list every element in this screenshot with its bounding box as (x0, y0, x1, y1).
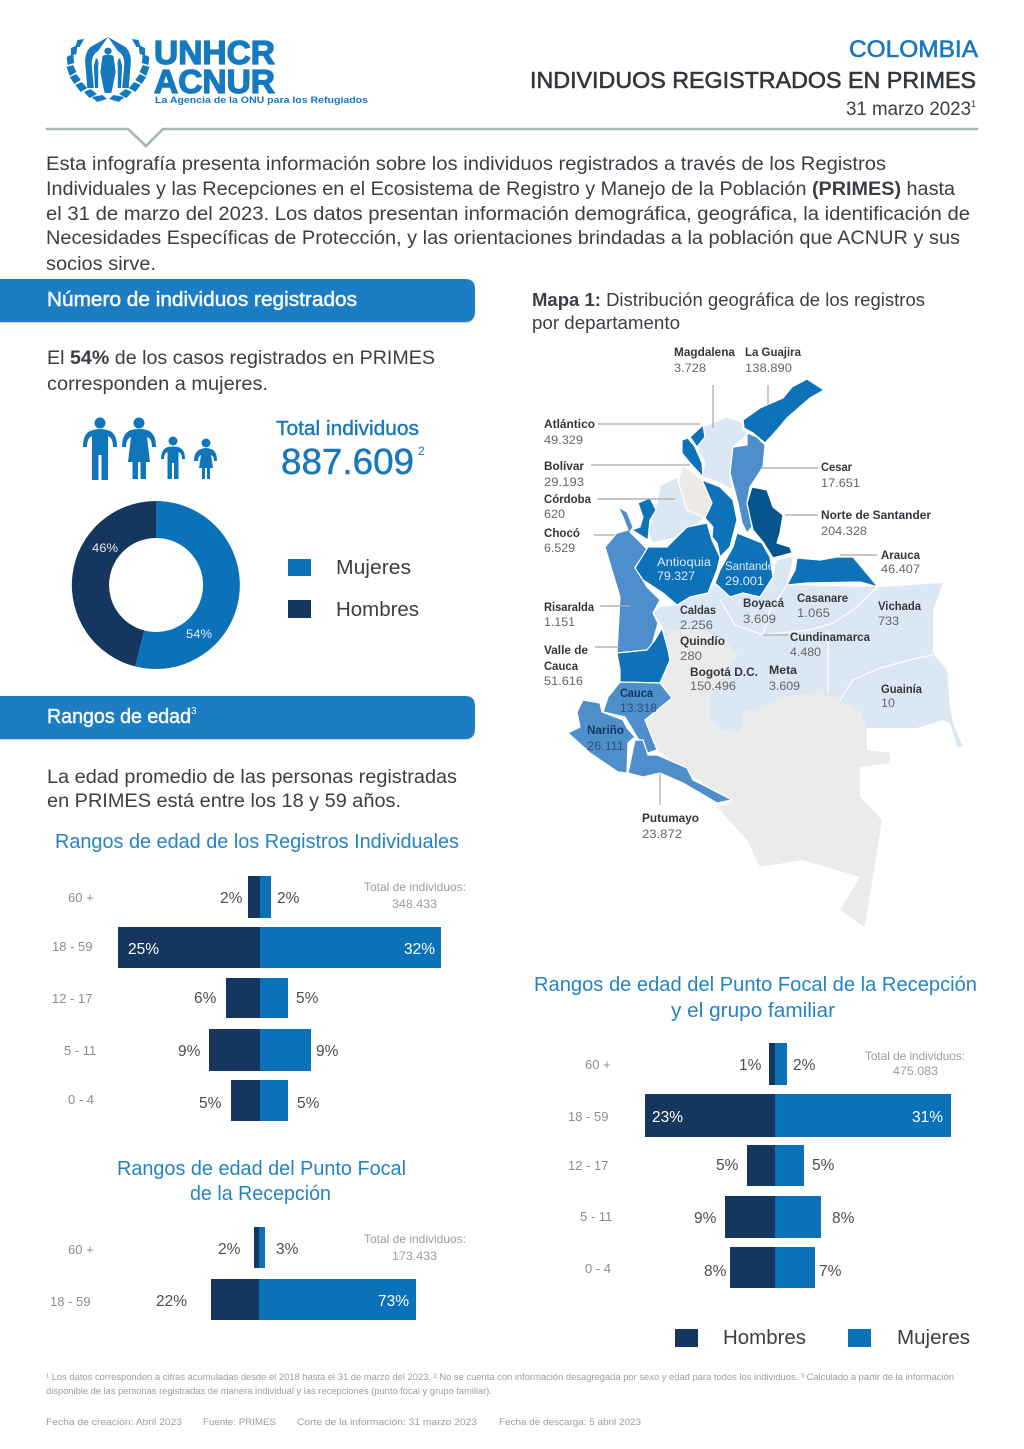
labels: department names and values: Nariño (587, 725, 624, 737)
chart: age pyramid of individual records: 12 - 17 (52, 991, 92, 1006)
donut legend: Mujeres (336, 557, 411, 579)
labels: department names and values: 138.890 (745, 363, 792, 375)
region: Arauca (787, 557, 878, 587)
intro text block: socios sirve. (46, 254, 156, 275)
labels: department names and values: Cauca (544, 661, 579, 673)
region: Sucre (677, 467, 712, 518)
chart: age pyramid of individual records: 60 + (68, 890, 94, 905)
chart: age pyramid of focal point reception: 73% (378, 1293, 409, 1310)
labels: department names and values: 79.327 (657, 571, 695, 583)
labels: department names and values: 2.256 (680, 620, 713, 632)
labels: department names and values: Cauca (620, 688, 654, 700)
map title (532, 290, 925, 333)
labels: department names and values: 29.193 (544, 477, 584, 489)
chart: age pyramid of individual records: 6% (194, 990, 217, 1007)
labels: department names and values: Boyacá (743, 598, 785, 610)
icon: family of four people (83, 418, 217, 480)
section header: Rangos de edad: Rangos de edad (47, 706, 191, 728)
region: Santander (715, 533, 773, 597)
labels: department names and values: 1.065 (797, 608, 830, 620)
chart legend (675, 1327, 970, 1349)
statement: 54% women: El 54% de los casos registrados en PRIMES (47, 348, 435, 369)
statement: 54% women: corresponden a mujeres. (47, 374, 268, 395)
labels: department names and values: Cundinamarca (790, 632, 871, 644)
section header: Número de individuos registrados (0, 279, 475, 323)
region: Norte de Santander (747, 487, 792, 558)
heading: Punto Focal and family group chart (534, 974, 977, 1022)
region: La Guajira (743, 379, 824, 443)
heading: Punto Focal chart: de la Recepción (190, 1183, 331, 1205)
footer metadata: Fuente: PRIMES (203, 1417, 276, 1428)
region: Valle del Cauca (617, 628, 670, 683)
labels: department names and values: 13.318 (620, 703, 657, 715)
labels: department names and values: Norte de Santander (821, 510, 932, 522)
labels: department names and values: 620 (544, 509, 565, 521)
donut legend: Hombres (336, 599, 419, 621)
chart: age pyramid of focal point and family group: 5% (716, 1157, 739, 1174)
labels: department names and values: Putumayo (642, 813, 699, 825)
total individuals: Total individuos (276, 417, 419, 440)
chart: age pyramid of focal point and family group: 60 + (585, 1057, 611, 1072)
statement: 54% women (47, 348, 435, 395)
labels: department names and values: 29.001 (725, 576, 764, 588)
labels: department names and values: 49.329 (544, 435, 583, 447)
chart: age pyramid of individual records: 5% (297, 1095, 320, 1112)
labels: department names and values: 23.872 (642, 829, 682, 841)
donut chart: sex split (72, 501, 240, 669)
intro text block: Necesidades Específicas de Protección, y las orientaciones brindadas a la población que ACNUR y sus (46, 228, 960, 249)
footer metadata (46, 1417, 641, 1428)
chart: age pyramid of focal point and family group: 9% (694, 1210, 717, 1227)
region: Antioquia north (632, 498, 656, 540)
labels: department names and values: Santander (725, 561, 778, 573)
chart: age pyramid of individual records: 2% (220, 890, 243, 907)
chart: age pyramid of focal point and family group: 1% (739, 1057, 762, 1074)
total individuals (276, 417, 425, 482)
total individuals: 887.609 (281, 441, 414, 482)
footer metadata: Fecha de descarga: 5 abril 2023 (499, 1417, 641, 1428)
labels: department names and values: Guainía (881, 684, 923, 696)
labels: department names and values: 4.480 (790, 647, 821, 659)
labels: department names and values: Bolívar (544, 461, 585, 473)
section header: Número de individuos registrados: Número de individuos registrados (47, 289, 357, 311)
labels: department names and values: 6.529 (544, 543, 575, 555)
section header: Rangos de edad (0, 696, 475, 740)
chart: age pyramid of individual records: Total de individuos: (364, 880, 466, 894)
labels: department names and values: 26.111 (587, 741, 624, 753)
chart: age pyramid of focal point and family group: 475.083 (893, 1064, 938, 1078)
chart: age pyramid of focal point and family group: 8% (704, 1263, 727, 1280)
title block: COLOMBIA (849, 36, 978, 63)
chart: age pyramid of individual records: 348.433 (392, 897, 437, 911)
labels: department names and values: Atlántico (544, 419, 595, 431)
header logo: UNHCR ACNUR: La Agencia de la ONU para los Refugiados (155, 95, 368, 106)
labels: department names and values: 51.616 (544, 676, 583, 688)
footer metadata: Fecha de creación: Abril 2023 (46, 1417, 182, 1428)
labels: department names and values: Bogotá D.C. (690, 667, 758, 679)
heading: Punto Focal chart (117, 1158, 406, 1205)
chart: age pyramid of individual records: 32% (404, 941, 435, 958)
chart: age pyramid of individual records: 18 - 59 (52, 939, 92, 954)
labels: department names and values: Quindío (680, 636, 725, 648)
chart: age pyramid of individual records: 9% (178, 1043, 201, 1060)
header logo: UNHCR ACNUR: UNHCR (154, 34, 275, 71)
region: Cauca (603, 682, 672, 753)
region: light blue eastern departments (653, 557, 963, 747)
labels: department names and values: Vichada (878, 601, 922, 613)
heading: Punto Focal and family group chart: Rangos de edad del Punto Focal de la Recepción (534, 974, 977, 996)
labels: department names and values: 150.496 (690, 681, 736, 693)
region: Bolivar (682, 438, 737, 557)
intro text block: Individuales y las Recepciones en el Ecosistema de Registro y Manejo de la Población (PRIMES) hasta (46, 179, 955, 200)
region: Atlantico (690, 425, 705, 447)
chart legend: Hombres (723, 1327, 806, 1349)
intro text block (46, 154, 970, 275)
chart: age pyramid of individual records (52, 876, 466, 1121)
chart: age pyramid of focal point and family group: 0 - 4 (585, 1261, 611, 1276)
chart: age pyramid of focal point and family group: 5 - 11 (580, 1209, 612, 1224)
heading: Punto Focal chart: Rangos de edad del Punto Focal (117, 1158, 406, 1180)
donut chart: sex split: 54% (186, 627, 212, 641)
chart: age pyramid of focal point and family group: 2% (793, 1057, 816, 1074)
chart: age pyramid of focal point and family group: 7% (819, 1263, 842, 1280)
chart: age pyramid of focal point reception: Total de individuos: (364, 1232, 466, 1246)
statement: average age: en PRIMES está entre los 18 y 59 años. (47, 791, 401, 812)
labels: department names and values: Chocó (544, 528, 580, 540)
chart: age pyramid of individual records: 5% (199, 1095, 222, 1112)
intro text block: Esta infografía presenta información sobre los individuos registrados a través de los Registros (46, 154, 886, 175)
chart: age pyramid of focal point reception (50, 1227, 466, 1320)
labels: department names and values: 280 (680, 651, 702, 663)
labels: department names and values: Arauca (881, 550, 921, 562)
chart: age pyramid of individual records: 9% (316, 1043, 339, 1060)
header logo: UNHCR ACNUR: ACNUR (154, 63, 275, 100)
region: grey departments with no data (645, 630, 890, 927)
statement: average age: La edad promedio de las personas registradas (47, 767, 457, 788)
heading: Punto Focal and family group chart: y el grupo familiar (671, 1000, 835, 1022)
donut legend (288, 557, 419, 621)
labels: department names and values: 46.407 (881, 564, 920, 576)
title block (530, 36, 978, 120)
labels: department names and values: Casanare (797, 593, 848, 605)
header logo: UNHCR ACNUR (67, 34, 368, 106)
region: Choco and Risaralda (605, 507, 660, 653)
chart: age pyramid of focal point reception: 60 + (68, 1242, 94, 1257)
labels: department names and values: 3.609 (743, 614, 776, 626)
labels: department names and values: Antioquia (657, 557, 712, 569)
intro text block: el 31 de marzo del 2023. Los datos presentan información demográfica, geográfica, la identificación de (46, 204, 970, 225)
labels: department names and values: 10 (881, 698, 895, 710)
region: Cordoba (648, 477, 705, 543)
icon: UNHCR emblem with hands, person and laurel (67, 37, 149, 102)
labels: department names and values: 733 (878, 616, 899, 628)
chart: age pyramid of individual records: 5% (296, 990, 319, 1007)
heading: Registros Individuales chart: Rangos de edad de los Registros Individuales (55, 831, 459, 853)
statement: average age (47, 767, 457, 812)
chart: age pyramid of focal point and family group (568, 1043, 965, 1288)
chart: age pyramid of focal point and family group: 8% (832, 1210, 855, 1227)
chart legend: Mujeres (897, 1327, 970, 1349)
labels: department names and values: Meta (769, 665, 798, 677)
chart: age pyramid of individual records: 2% (277, 890, 300, 907)
labels: department names and values: 1.151 (544, 617, 575, 629)
total individuals: 2 (418, 444, 425, 458)
labels: department names and values: Cesar (821, 462, 853, 474)
map title: Mapa 1: Distribución geográfica de los registros (532, 290, 925, 310)
chart: age pyramid of focal point and family group: 12 - 17 (568, 1158, 608, 1173)
footer metadata: Corte de la información: 31 marzo 2023 (297, 1417, 477, 1428)
map: Colombia departments (544, 347, 963, 927)
region: Narino (568, 700, 635, 773)
chart: age pyramid of focal point and family group: 31% (912, 1109, 943, 1126)
section header: Rangos de edad: 3 (191, 706, 197, 717)
footnotes (46, 1372, 954, 1397)
region: Putumayo (628, 740, 732, 803)
labels: department names and values: 3.728 (674, 363, 706, 375)
labels: department names and values: 204.328 (821, 526, 867, 538)
chart: age pyramid of focal point and family group: 18 - 59 (568, 1109, 608, 1124)
title block: INDIVIDUOS REGISTRADOS EN PRIMES (530, 67, 976, 93)
chart: age pyramid of focal point and family group: 5% (812, 1157, 835, 1174)
labels: department names and values: La Guajira (745, 347, 802, 359)
labels: department names and values: Risaralda (544, 602, 595, 614)
region: Antioquia (635, 523, 720, 605)
footnotes: ¹ Los datos corresponden a cifras acumuladas desde el 2018 hasta el 31 de marzo del 2023. ² No se cuenta con información desagregada por sexo y edad para todos los individuos. ³ Calculado a partir de la información (46, 1372, 954, 1383)
chart: age pyramid of focal point and family group: Total de individuos: (865, 1049, 965, 1063)
chart: age pyramid of focal point reception: 173.433 (392, 1249, 437, 1263)
chart: age pyramid of individual records: 25% (128, 941, 159, 958)
chart: age pyramid of focal point and family group: 23% (652, 1109, 683, 1126)
footnotes: disponible de las personas registradas de manera individual y las recepciones (punto focal y grupo familiar). (46, 1386, 492, 1397)
chart: age pyramid of focal point reception: 3% (276, 1241, 299, 1258)
chart: age pyramid of individual records: 0 - 4 (68, 1092, 94, 1107)
chart: age pyramid of focal point reception: 2% (218, 1241, 241, 1258)
donut chart: sex split: 46% (92, 541, 118, 555)
region: Cesar (730, 433, 765, 533)
labels: department names and values (544, 347, 932, 841)
labels: department names and values: Caldas (680, 605, 716, 617)
title block: 1 (971, 99, 976, 109)
chart: age pyramid of focal point reception: 18 - 59 (50, 1294, 90, 1309)
map title: por departamento (532, 313, 680, 333)
region: Magdalena (697, 417, 750, 490)
labels: department names and values: Valle de (544, 645, 588, 657)
title block: 31 marzo 2023 (846, 99, 971, 120)
chart: age pyramid of focal point reception: 22% (156, 1293, 187, 1310)
labels: department names and values: 17.651 (821, 478, 860, 490)
labels: department names and values: Córdoba (544, 494, 592, 506)
chart: age pyramid of individual records: 5 - 11 (64, 1043, 96, 1058)
labels: department names and values: 3.609 (769, 681, 800, 693)
labels: department names and values: Magdalena (674, 347, 736, 359)
